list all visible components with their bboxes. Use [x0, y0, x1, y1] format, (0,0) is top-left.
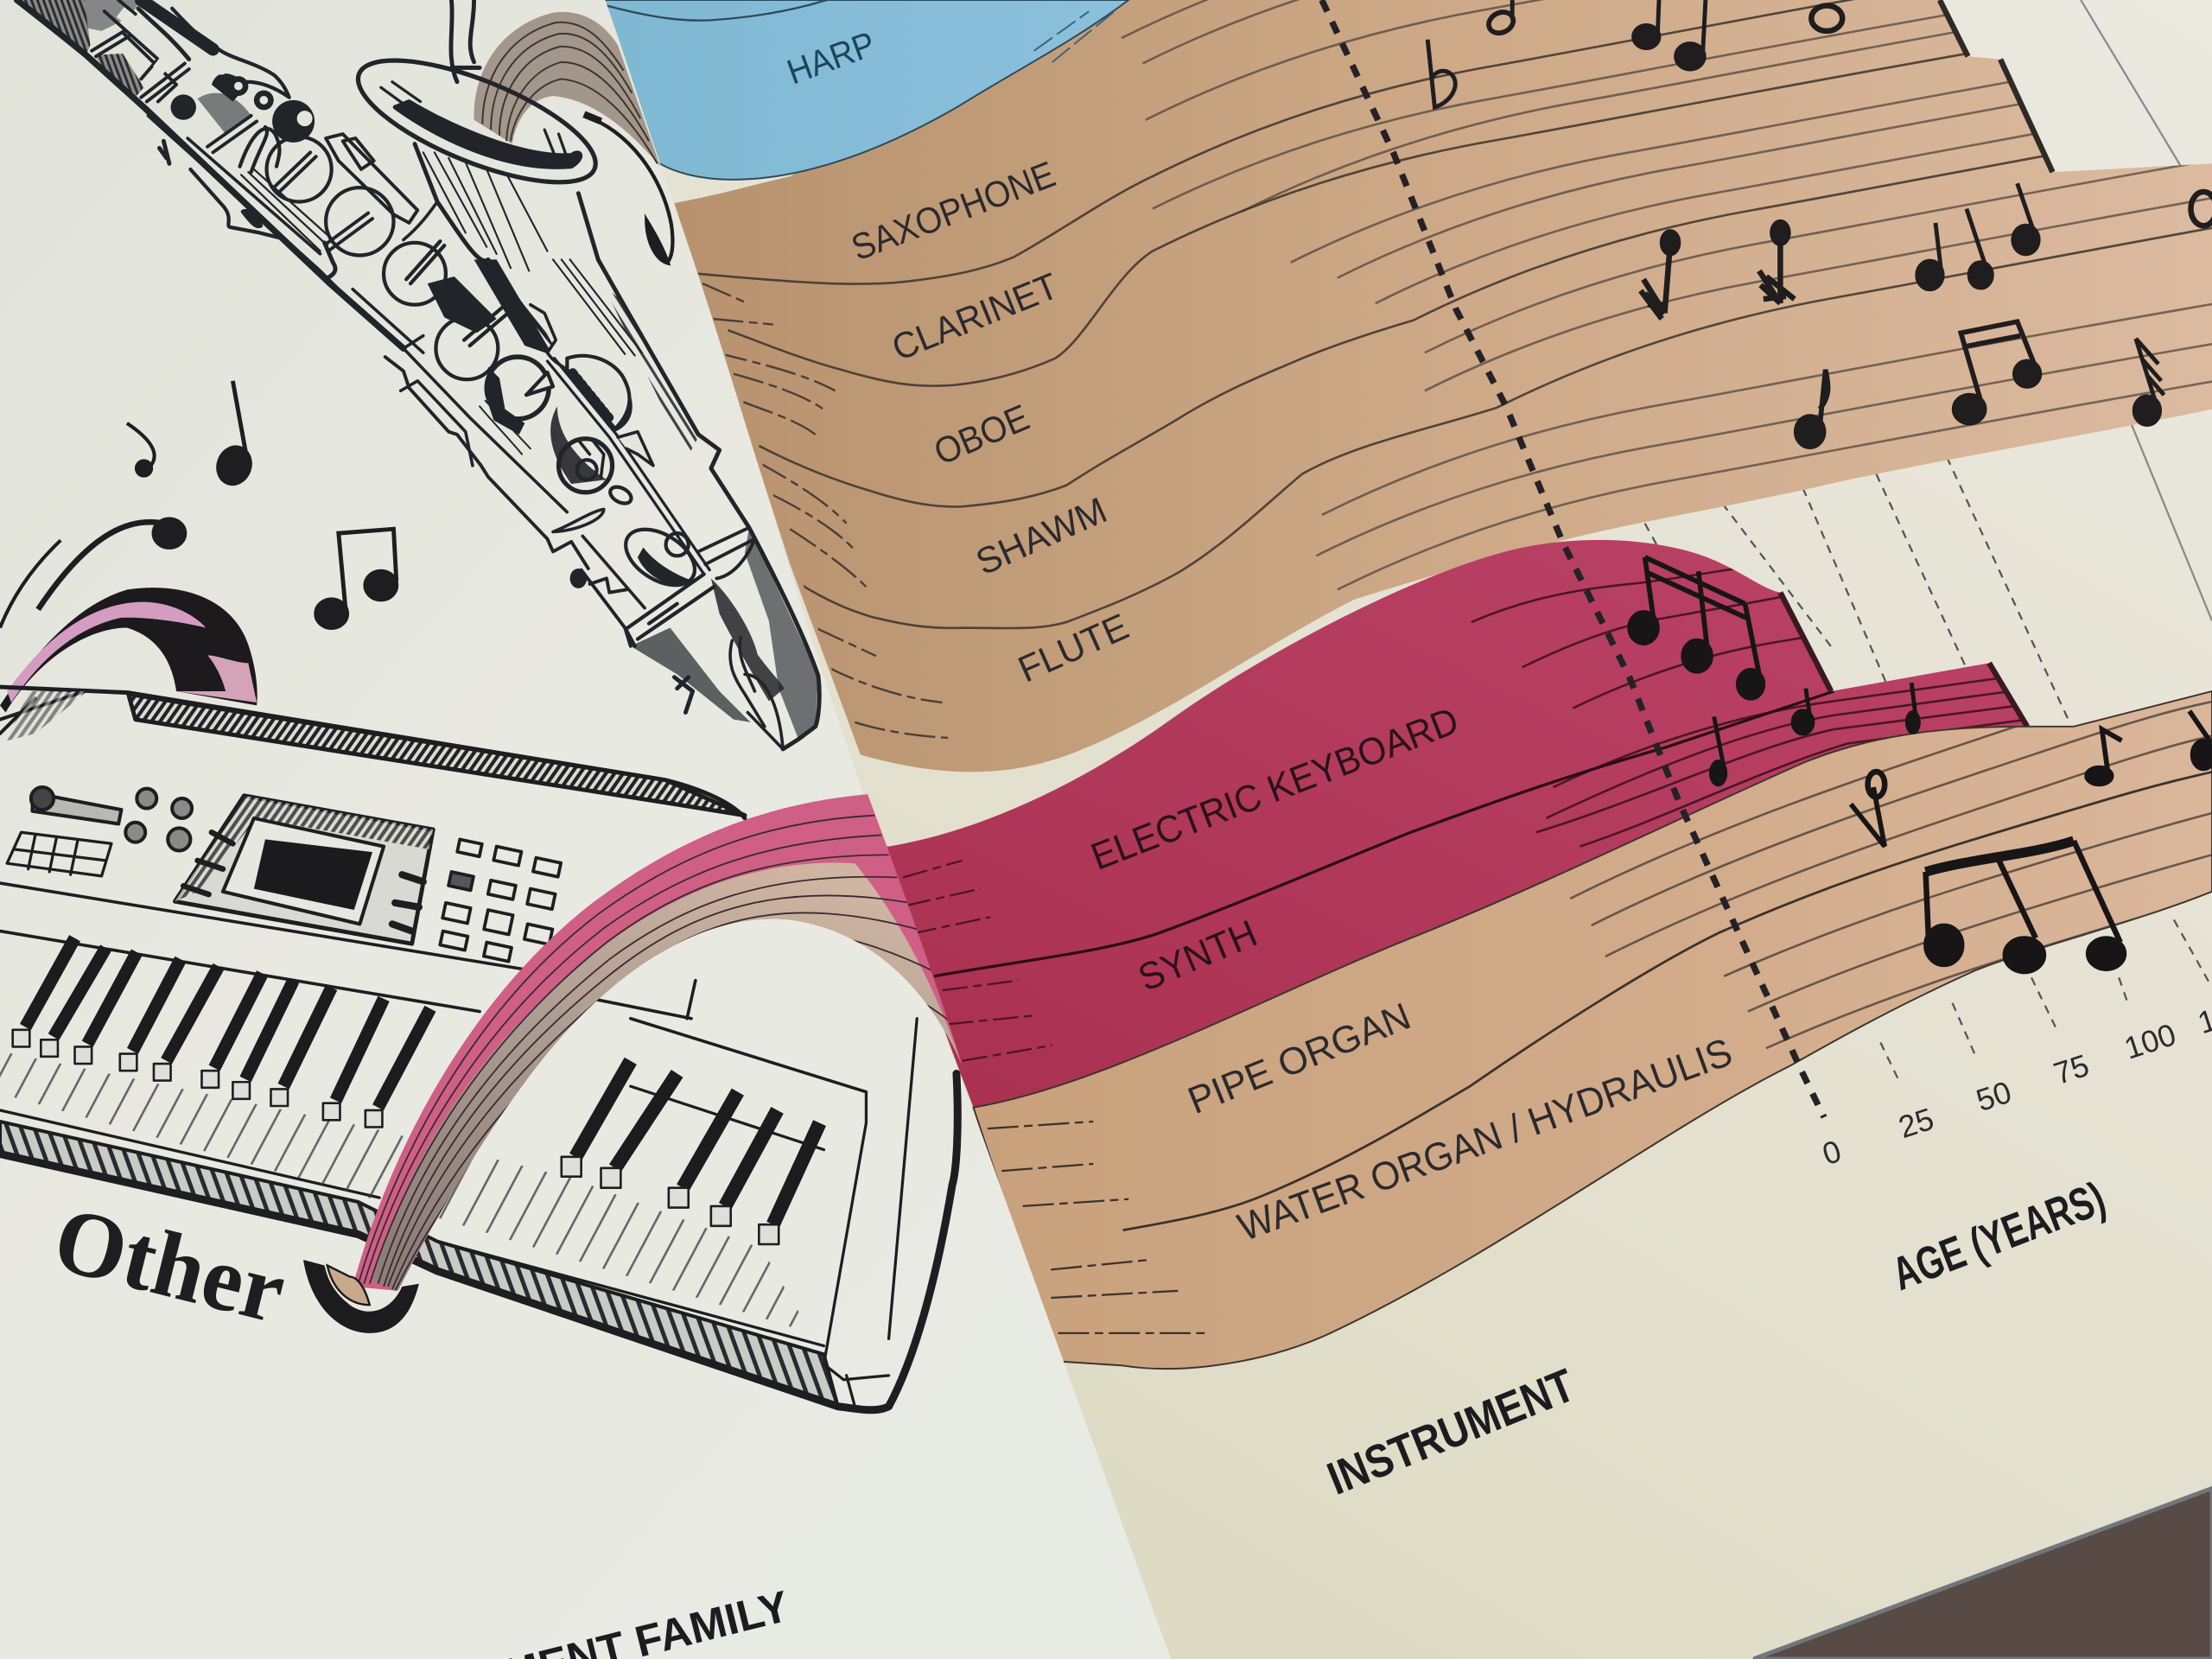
axis tick labels: 75 [2050, 1047, 2094, 1091]
icon: curved hook mark [584, 114, 672, 264]
axis title: instrument: INSTRUMENT [1320, 1359, 1582, 1505]
axis tick labels [1818, 991, 2212, 1172]
label: shawm: SHAWM [970, 489, 1113, 582]
curl base loop [303, 1260, 419, 1333]
axis title: age: AGE (YEARS) [1885, 1173, 2112, 1300]
label: oboe: OBOE [928, 397, 1035, 473]
label: clarinet: CLARINET [887, 265, 1064, 368]
band: saxophone, clarinet, oboe, shawm, flute [674, 0, 2212, 772]
axis tick labels: 100 [2120, 1016, 2180, 1066]
gridline: age axis guides [1645, 0, 2212, 1084]
keyboard upper lines [0, 883, 866, 1092]
zero-age dashed axis [1322, 0, 1824, 1117]
saxophone neck hatching [22, 0, 144, 99]
end caps of top band [1940, 0, 2053, 172]
icon: slurred note with tail [0, 518, 187, 628]
icon: small eighth note [127, 423, 155, 477]
keyboard display [175, 796, 433, 944]
icon: quarter note [212, 381, 257, 490]
axis tick labels: 50 [1972, 1074, 2016, 1118]
notes: pink band [1628, 557, 1920, 785]
notes: top row [1427, 0, 1842, 107]
saxophone key discs [267, 134, 645, 608]
keyboard right edge heavy outline [0, 1073, 957, 1410]
icon: beamed notes [315, 529, 397, 629]
label: harp: HARP [782, 23, 880, 92]
label: water organ / hydraulis: WATER ORGAN / HYDRAULIS [1232, 1030, 1738, 1249]
table surface corner [1753, 1488, 2212, 1659]
keyboard black key tips left [13, 1030, 382, 1127]
label: synth: SYNTH [1132, 912, 1263, 1000]
saxophone bell outline [415, 144, 551, 343]
curl: pink page behind keyboard [0, 588, 257, 712]
left page [0, 0, 1171, 1659]
saxophone dark key cups [171, 73, 315, 143]
band: harp [600, 0, 1128, 180]
keyboard top panel band [129, 694, 745, 816]
keyboard button grid [440, 839, 561, 962]
band: pipe organ and water organ [974, 631, 2212, 1369]
keyboard black keys right [575, 1061, 820, 1224]
curl: top page edge over saxophone bell [474, 12, 660, 167]
label: electric keyboard: ELECTRIC KEYBOARD [1085, 699, 1464, 879]
saxophone neck strap [451, 0, 480, 82]
keyboard front lip [0, 1122, 838, 1407]
label: pipe organ: PIPE ORGAN [1182, 995, 1416, 1122]
keyboard black keys left [25, 938, 430, 1108]
heading: other: Other [44, 1187, 296, 1344]
notes: third row [1795, 321, 2164, 448]
keyboard slider and knobs [7, 787, 192, 876]
curl: pink page over keyboard [353, 794, 962, 1291]
axis tick labels: 0 [1818, 1133, 1846, 1172]
notes: lower tan band [1851, 711, 2212, 974]
saxophone bell rim [344, 35, 610, 207]
saxophone bell hatching [604, 286, 700, 453]
illustration: keyboard [0, 687, 957, 1410]
saxophone key highlights [117, 7, 313, 126]
keyboard back edge [0, 687, 745, 818]
axis tick labels: 25 [1894, 1101, 1938, 1145]
band: electric keyboard and synth [874, 540, 2027, 1108]
label: saxophone: SAXOPHONE [846, 154, 1061, 268]
notes: second row [1641, 183, 2212, 319]
illustration: saxophone [17, 0, 819, 749]
keyboard black key tips right [562, 1157, 779, 1244]
keyboard white key hatch [0, 1051, 811, 1333]
label: flute: FLUTE [1012, 606, 1135, 690]
saxophone lower keywork [435, 305, 783, 749]
saxophone upper tube lines [17, 0, 404, 348]
saxophone mid dark mass [428, 259, 818, 740]
